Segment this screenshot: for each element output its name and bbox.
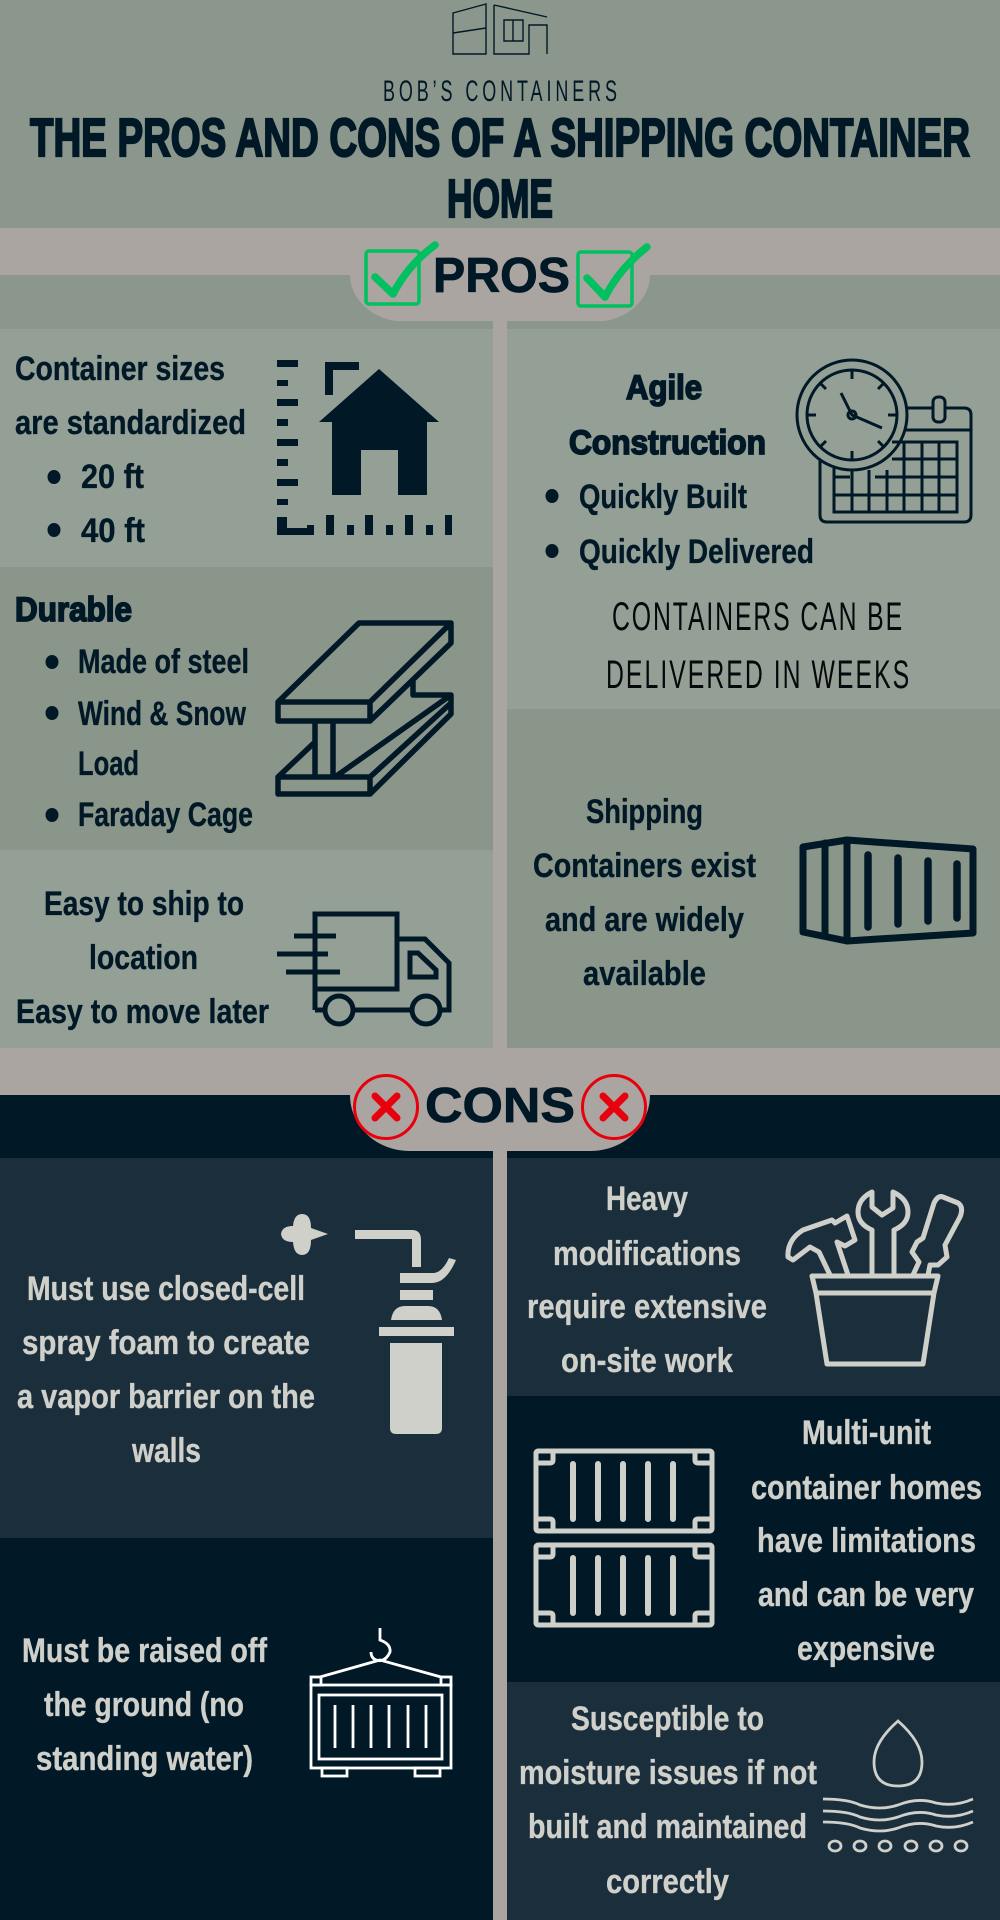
icon: clock and calendar: [797, 360, 971, 522]
panel: easy to ship: [0, 850, 493, 1048]
pros badge: [350, 245, 650, 331]
panel: agile construction: [507, 329, 1000, 709]
text: easy to ship: Easy to ship to: [44, 885, 244, 923]
icon: left green check: [366, 245, 435, 304]
icon: steel i-beam: [278, 623, 451, 794]
text: widely available: available: [583, 955, 706, 993]
panel: moisture: [507, 1682, 1000, 1920]
panel: widely available: [507, 709, 1000, 1048]
centre column: cons: [493, 1140, 507, 1920]
text: durable: Wind & Snow: [78, 695, 246, 733]
text: spray foam: walls: [131, 1432, 201, 1470]
text: widely available: Containers exist: [533, 847, 756, 885]
panel: raised off the ground: [22, 1628, 451, 1778]
text: container sizes: [15, 350, 246, 550]
text: moisture: moisture issues if not: [519, 1754, 817, 1792]
text: container sizes: Container sizes: [15, 350, 225, 388]
panel: cons background: [0, 1095, 1000, 1920]
text: container sizes: are standardized: [15, 404, 246, 442]
text: multi-unit: Multi-unit: [802, 1414, 931, 1452]
text: spray foam: Must use closed-cell: [27, 1270, 305, 1308]
pros label: PROS: [433, 249, 570, 303]
panel: spray foam: [0, 1158, 493, 1538]
icon: spray foam can: [281, 1214, 456, 1434]
text: delivered in weeks: DELIVERED IN WEEKS: [606, 653, 909, 698]
text: easy to ship: [16, 885, 269, 1031]
panel: durable: [0, 567, 493, 850]
text: moisture: [519, 1700, 817, 1901]
text: durable: Load: [78, 745, 139, 783]
text: heavy modifications: require extensive: [527, 1288, 767, 1326]
header background: [0, 0, 1000, 329]
icon: bucket of tools: [788, 1192, 962, 1364]
text: moisture: built and maintained: [528, 1808, 807, 1846]
panel: container sizes: [0, 329, 493, 567]
brand name: BOB’S CONTAINERS: [383, 76, 617, 108]
text: raised off the ground: the ground (no: [44, 1686, 244, 1724]
text: widely available: and are widely: [545, 901, 744, 939]
text: durable: Durable: [15, 591, 132, 629]
logo: bob's containers: [453, 4, 547, 54]
panel: lower divider and centre column: [0, 329, 1000, 1095]
text: raised off the ground: standing water): [36, 1740, 253, 1778]
text: spray foam: a vapor barrier on the: [17, 1378, 315, 1416]
text: agile construction: Quickly Built: [579, 478, 747, 516]
text: heavy modifications: on-site work: [561, 1342, 733, 1380]
text: agile construction: [546, 369, 814, 571]
title: [30, 108, 970, 229]
panel: heavy modifications: [507, 1158, 1000, 1396]
icon: right red cross: [582, 1076, 646, 1138]
text: raised off the ground: [22, 1632, 268, 1778]
text: durable: [15, 591, 253, 834]
text: multi-unit: expensive: [797, 1630, 935, 1668]
icon: shipping container: [803, 840, 973, 941]
icon: measured house: [277, 360, 452, 535]
text: multi-unit: [751, 1414, 982, 1668]
text: easy to ship: location: [89, 939, 198, 977]
text: container sizes: 40 ft: [81, 512, 145, 550]
text: spray foam: [17, 1270, 315, 1470]
cons label: CONS: [425, 1079, 575, 1133]
text: widely available: Shipping: [586, 793, 703, 831]
text: easy to ship: Easy to move later: [16, 993, 269, 1031]
text: agile construction: Agile: [626, 369, 702, 407]
icon: delivery truck: [277, 914, 449, 1024]
text: spray foam: spray foam to create: [22, 1324, 310, 1362]
text: heavy modifications: [527, 1180, 767, 1380]
text: container sizes: 20 ft: [81, 458, 144, 496]
icon: hoisted container: [311, 1628, 451, 1776]
text: raised off the ground: Must be raised off: [22, 1632, 268, 1670]
text: moisture: Susceptible to: [571, 1700, 764, 1738]
text: widely available: [533, 793, 756, 993]
text: heavy modifications: Heavy: [606, 1180, 688, 1218]
text: delivered in weeks: CONTAINERS CAN BE: [612, 595, 902, 640]
panel: multi-unit: [536, 1414, 982, 1668]
icon: water drop and waves: [823, 1721, 973, 1851]
panel: pros divider band: [0, 228, 1000, 275]
text: agile construction: Construction: [569, 424, 766, 462]
title: HOME: [447, 169, 553, 229]
icon: left red cross: [354, 1076, 418, 1138]
text: durable: Faraday Cage: [78, 796, 253, 834]
text: durable: Made of steel: [78, 643, 249, 681]
icon: right green check: [578, 247, 647, 306]
icon: stacked containers: [536, 1451, 712, 1625]
text: agile construction: Quickly Delivered: [579, 533, 814, 571]
cons badge: [350, 1076, 650, 1151]
text: moisture: correctly: [606, 1863, 729, 1901]
text: delivered in weeks: [606, 595, 909, 698]
text: heavy modifications: modifications: [553, 1235, 741, 1273]
